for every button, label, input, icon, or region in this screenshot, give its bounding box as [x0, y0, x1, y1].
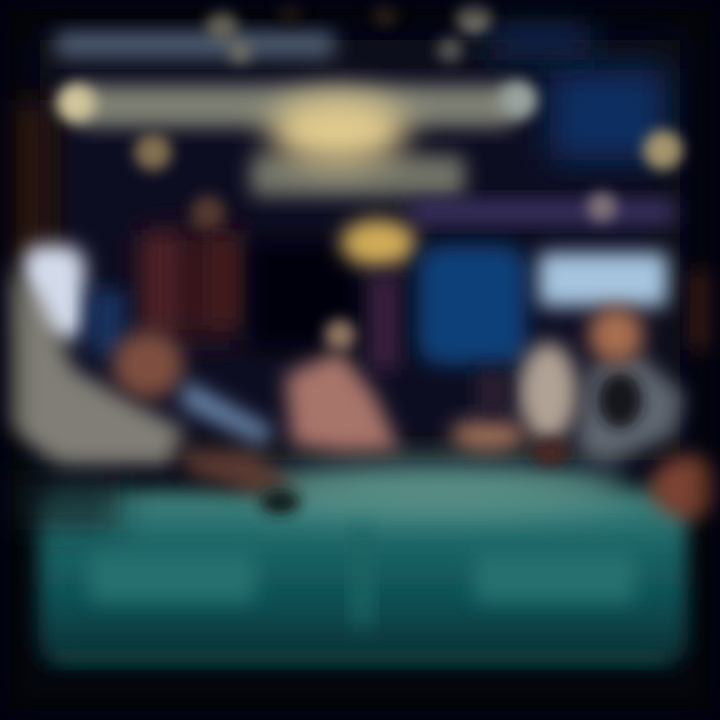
right player shirt	[575, 355, 685, 465]
table: centre strip	[352, 530, 372, 625]
panel: bright window right	[538, 252, 668, 307]
background: dim room tones	[5, 15, 680, 460]
distant figure	[478, 370, 506, 415]
sign right bulb	[498, 80, 538, 120]
sign left bulb	[56, 83, 96, 123]
table: green felt	[0, 462, 688, 665]
panel: blue backdrop	[418, 245, 526, 365]
right player hand	[450, 418, 526, 452]
right player white sleeve	[518, 342, 578, 442]
sign top text band	[55, 30, 335, 58]
table: left printed panel	[90, 552, 255, 602]
left player hand	[175, 450, 295, 495]
lamp: gold pendant	[340, 219, 416, 370]
band: purple beam	[410, 192, 675, 224]
person: right player	[450, 307, 685, 465]
table: upper highlight	[250, 462, 630, 514]
small lamp	[190, 195, 226, 231]
table: left shade	[0, 470, 120, 530]
hanging bulb left	[134, 133, 172, 171]
sign: glowing marquee	[55, 0, 683, 231]
left window	[20, 245, 85, 340]
person: centre hands	[285, 319, 400, 452]
person: far right forearm	[650, 270, 720, 519]
light sleeve	[180, 380, 275, 445]
dark chip stack	[260, 490, 300, 514]
table: bottom edge	[55, 648, 665, 664]
person: left player arm	[0, 265, 300, 514]
sign middle text band	[75, 85, 515, 127]
knuckle shadow	[532, 439, 568, 465]
right player dark vest	[598, 372, 642, 428]
top ornaments	[206, 0, 492, 63]
left player head	[112, 331, 184, 399]
far right bulb	[643, 130, 683, 170]
table: right printed panel	[475, 552, 635, 602]
right player head	[588, 307, 644, 363]
sign central glow	[268, 94, 408, 166]
sign lower text band	[250, 155, 465, 197]
pillars	[145, 235, 236, 330]
